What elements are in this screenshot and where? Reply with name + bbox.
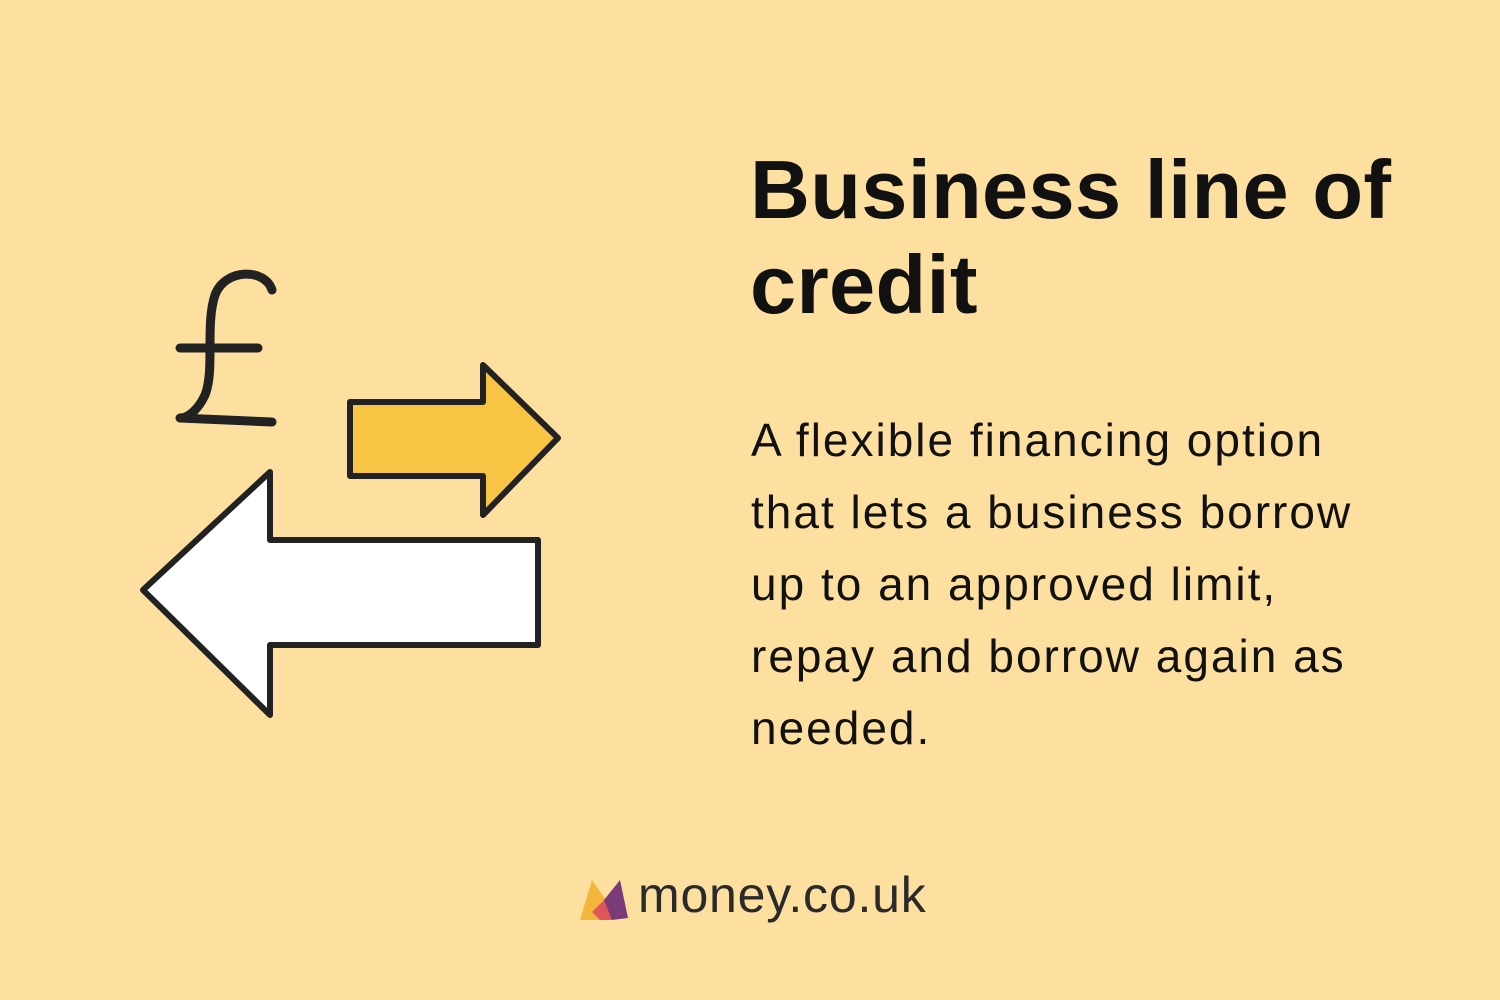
body text: needed. <box>751 702 931 754</box>
arrow: white left <box>143 472 538 715</box>
arrow: yellow right <box>350 365 558 515</box>
logo text: money.co.uk <box>638 867 927 923</box>
body text: that lets a business borrow <box>751 486 1352 538</box>
icon: logo mark <box>580 880 628 920</box>
title <box>750 143 1392 331</box>
body text: A flexible financing option <box>751 414 1324 466</box>
body text <box>751 414 1352 754</box>
body text: repay and borrow again as <box>751 630 1346 682</box>
title: credit <box>750 238 978 331</box>
logo <box>580 867 927 923</box>
illustration: pound and arrows <box>140 270 561 718</box>
icon: pound sign <box>180 274 272 422</box>
body text: up to an approved limit, <box>751 558 1277 610</box>
title: Business line of <box>750 143 1391 236</box>
